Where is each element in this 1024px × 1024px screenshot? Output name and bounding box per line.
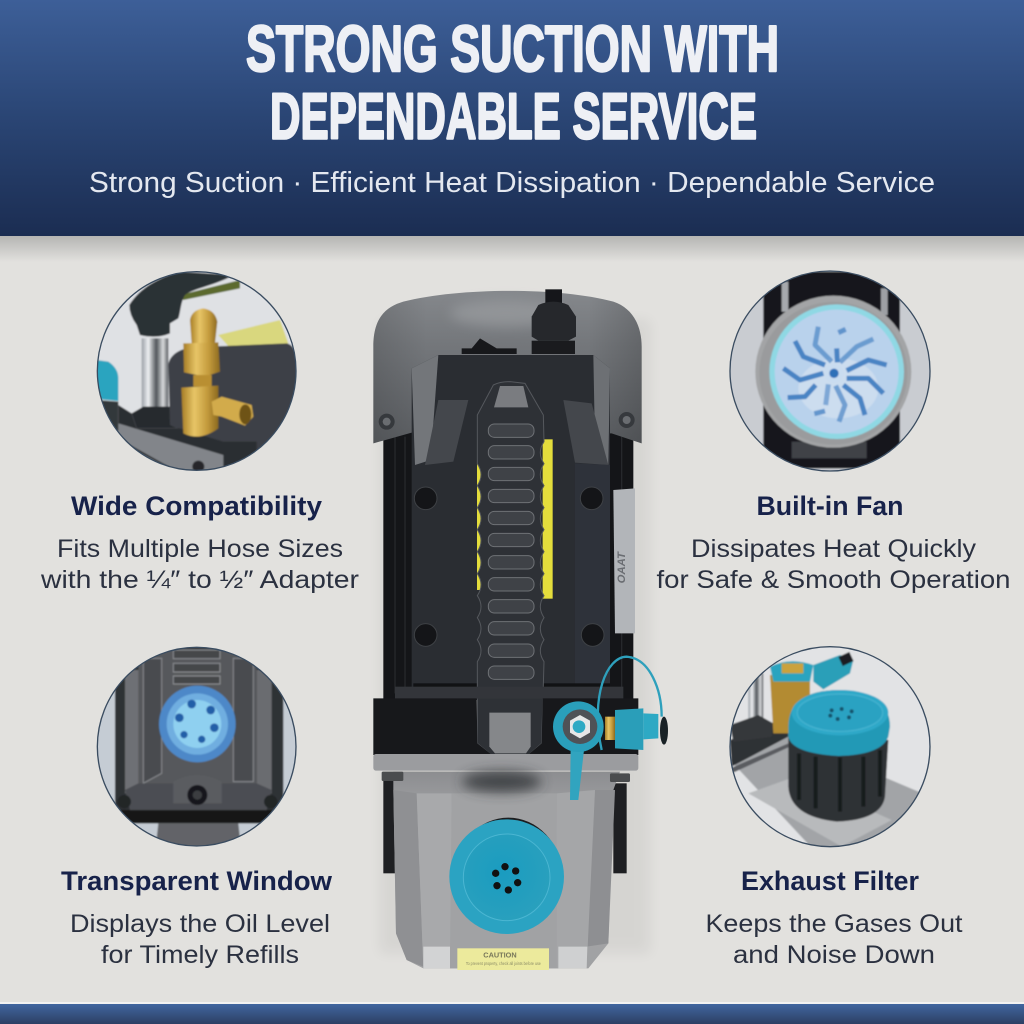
subtitle: Strong Suction · Efficient Heat Dissipation · Dependable Service <box>89 167 935 199</box>
description: Dissipates Heat Quickly <box>691 535 977 563</box>
pump: exhaust cap <box>449 818 564 934</box>
icon: fan photo circle <box>729 270 931 472</box>
description: and Noise Down <box>733 941 935 969</box>
pump: cable gland <box>532 289 576 354</box>
pump: switch <box>462 338 517 354</box>
heading: Exhaust Filter <box>741 866 919 896</box>
description: Keeps the Gases Out <box>706 910 963 938</box>
description <box>70 910 330 969</box>
heading: Wide Compatibility <box>71 491 322 521</box>
description <box>656 535 1010 594</box>
icon: exhaust filter photo circle <box>729 646 931 848</box>
icon: oil window photo circle <box>96 646 297 847</box>
pump: oil tank body <box>382 771 630 968</box>
pump: caution label: CAUTION <box>483 951 517 960</box>
description <box>40 535 359 594</box>
pump: screws <box>414 487 604 646</box>
pump: junction box <box>412 355 610 692</box>
pump: caution label <box>457 948 549 970</box>
pump: caution label: To prevent property, check all joints before use <box>466 961 541 966</box>
pump: inlet fitting with teal cap <box>553 657 668 800</box>
icon: brass adapter photo circle <box>96 271 297 471</box>
panel: transparent window <box>61 640 333 969</box>
description: Fits Multiple Hose Sizes <box>57 535 343 563</box>
header banner <box>0 0 1024 236</box>
pump: nameplate <box>613 488 635 633</box>
footer bar <box>0 1002 1024 1024</box>
description <box>706 910 963 969</box>
vacuum pump illustration <box>373 289 668 970</box>
description: with the ¼″ to ½″ Adapter <box>40 566 359 594</box>
heading: Transparent Window <box>61 866 333 896</box>
pump: back tabs <box>383 780 627 873</box>
pump: ribbed handle <box>477 382 544 757</box>
description: for Timely Refills <box>101 941 299 969</box>
description: for Safe & Smooth Operation <box>656 566 1010 594</box>
panel: exhaust filter <box>706 640 963 969</box>
pump: base plate <box>373 754 638 771</box>
pump: fan cap <box>373 291 642 443</box>
heading: Built-in Fan <box>756 491 904 521</box>
title: DEPENDABLE SERVICE <box>270 80 757 152</box>
pump: mounting block <box>373 687 638 756</box>
panel: built-in fan <box>656 265 1010 594</box>
description: Displays the Oil Level <box>70 910 330 938</box>
pump: yellow warning label <box>477 439 553 599</box>
pump: nameplate: OAAT <box>616 551 628 583</box>
panel: wide compatibility <box>40 265 359 594</box>
title <box>246 12 779 152</box>
pump: motor housing <box>383 427 633 700</box>
title: STRONG SUCTION WITH <box>246 12 779 85</box>
